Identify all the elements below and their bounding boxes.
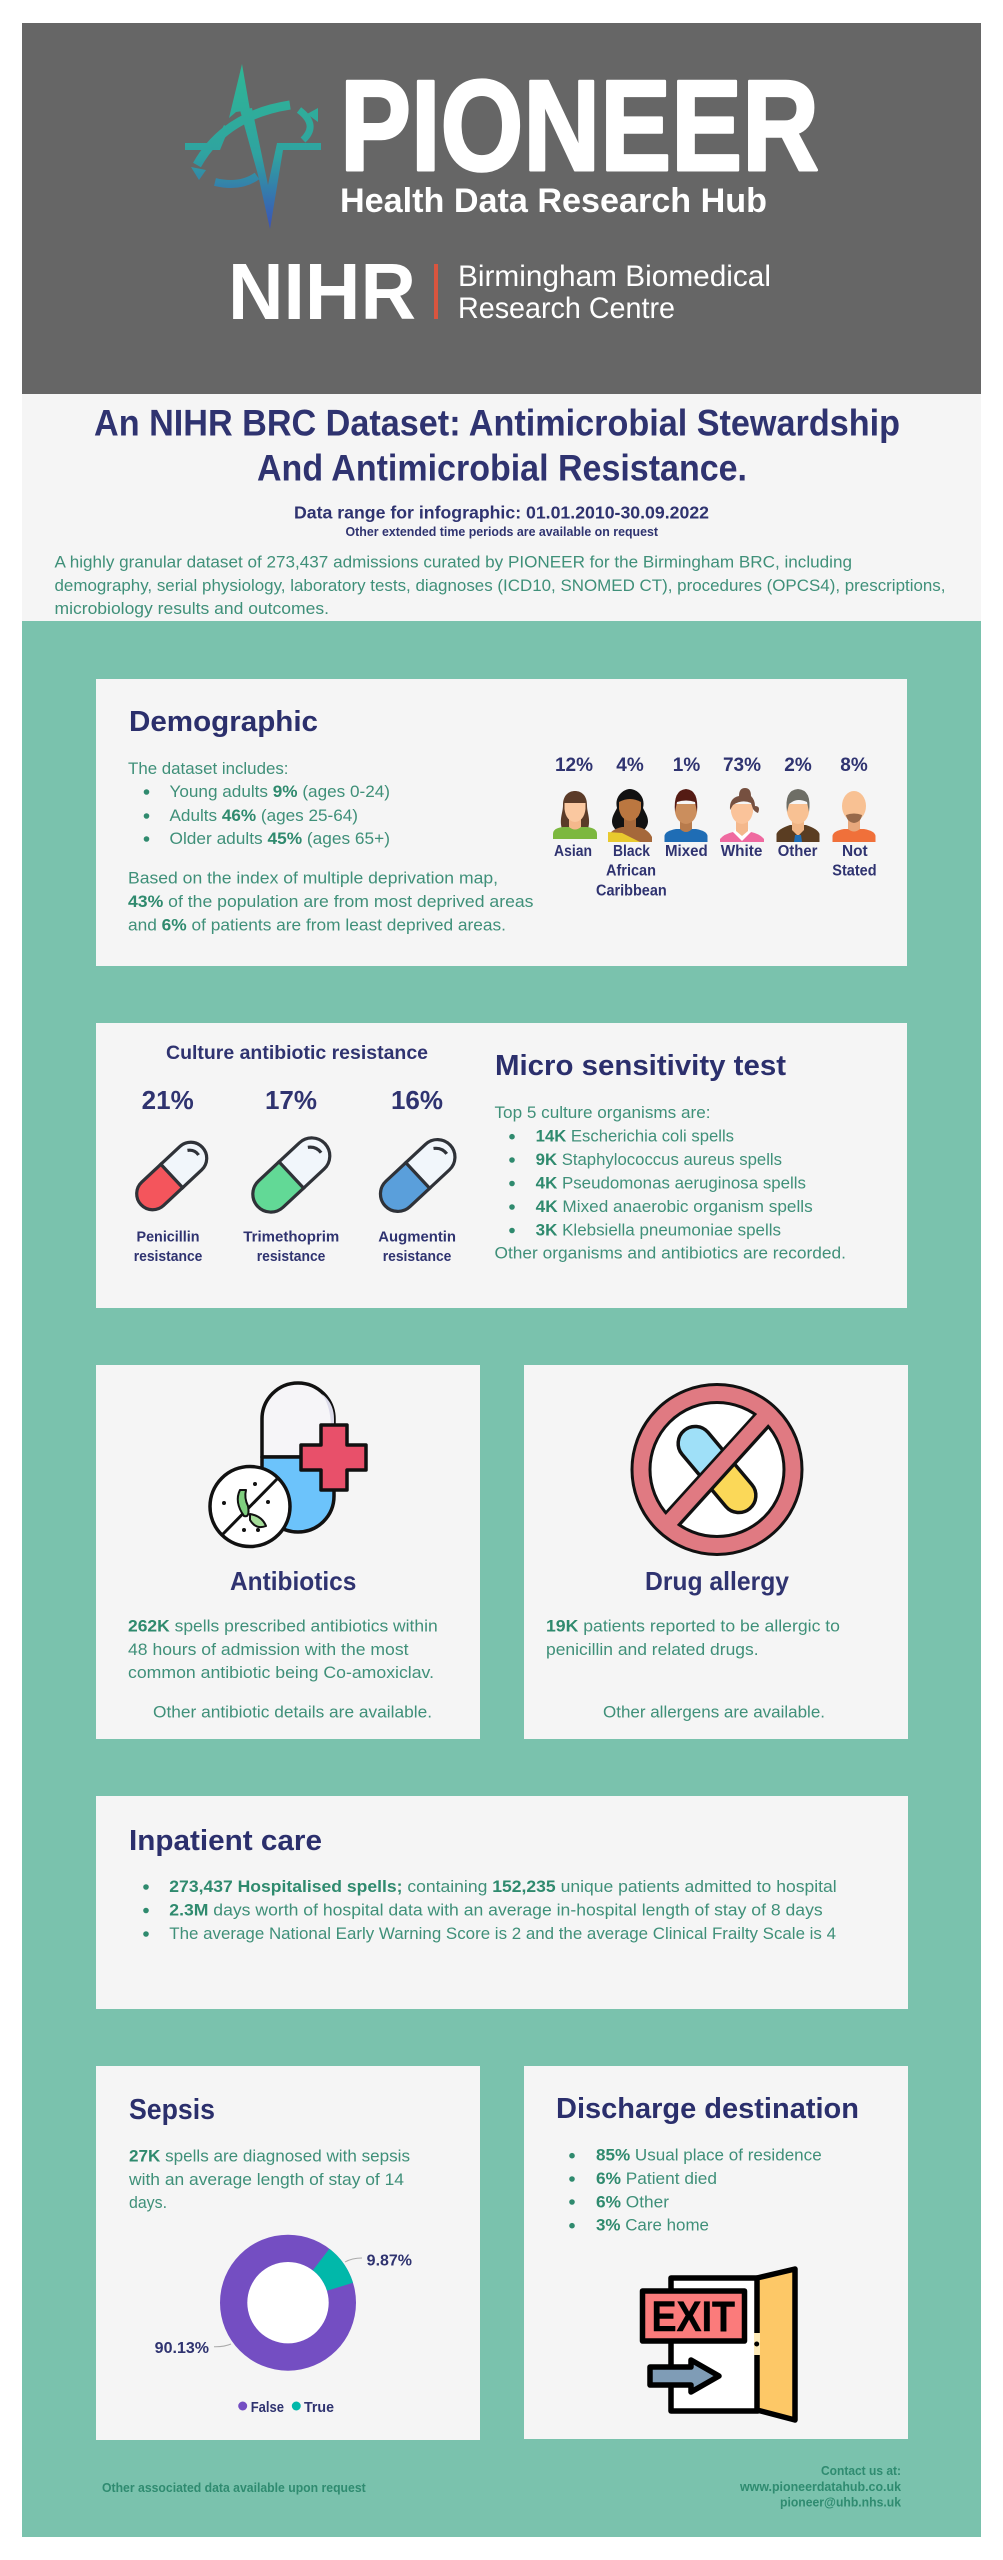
ethnicity labels: African (606, 863, 656, 880)
age breakdown: Adults 46% (ages 25-64) (170, 807, 358, 825)
deprivation text (128, 870, 534, 934)
resistance percentages: 21% (142, 1085, 194, 1115)
antibiotics text: Other antibiotic details are available. (153, 1704, 432, 1722)
icon: mixed person (664, 789, 708, 842)
data range note: Other extended time periods are available on request (346, 525, 659, 539)
discharge list: 6% Other (596, 2193, 670, 2211)
discharge list: 85% Usual place of residence (596, 2147, 822, 2165)
ethnicity percentages (555, 755, 868, 776)
sepsis heading: Sepsis (129, 2094, 215, 2126)
culture heading: Culture antibiotic resistance (166, 1043, 428, 1064)
discharge list: 6% Patient died (596, 2170, 717, 2188)
panel: antibiotics (96, 1365, 480, 1739)
Health Data Research Hub: Health Data Research Hub (340, 182, 767, 220)
Birmingham Biomedical Research Centre: Research Centre (458, 292, 675, 325)
ethnicity labels: Asian (554, 843, 592, 860)
organism list: Other organisms and antibiotics are recorded. (494, 1245, 846, 1263)
PIONEER wordmark: PIONEER (340, 54, 819, 198)
panel: drug allergy (524, 1365, 908, 1739)
sepsis text (128, 2148, 410, 2212)
icon: exit door (642, 2269, 795, 2420)
organism list: Top 5 culture organisms are: (494, 1104, 710, 1122)
drug allergy text: 19K patients reported to be allergic to (546, 1618, 840, 1636)
icon: green pill (245, 1130, 337, 1220)
age breakdown: Older adults 45% (ages 65+) (170, 830, 390, 848)
title: And Antimicrobial Resistance. (257, 448, 747, 488)
demographic heading: Demographic (129, 706, 318, 738)
icon: no drugs sign (641, 1394, 793, 1546)
antibiotics heading: Antibiotics (230, 1566, 356, 1596)
footer note: Other associated data available upon request (102, 2480, 366, 2495)
age breakdown (128, 760, 390, 848)
inpatient list: The average National Early Warning Score is 2 and the average Clinical Frailty Scale is 4 (169, 1925, 836, 1943)
antibiotics text: 262K spells prescribed antibiotics within (128, 1618, 438, 1636)
icon: red pill (130, 1136, 213, 1216)
panel: sepsis (96, 2066, 480, 2440)
sepsis text: with an average length of stay of 14 (128, 2171, 404, 2189)
organism list: 4K Mixed anaerobic organism spells (536, 1198, 813, 1216)
organism list: 14K Escherichia coli spells (536, 1128, 734, 1146)
drug allergy text (546, 1618, 840, 1722)
micro sensitivity heading: Micro sensitivity test (495, 1050, 786, 1082)
icon: antibiotics capsule, cross and tablet (210, 1383, 366, 1546)
donut chart (155, 2235, 412, 2371)
ethnicity percentages: 73% (723, 755, 761, 776)
antibiotics text: 48 hours of admission with the most (128, 1641, 409, 1659)
resistance labels (134, 1229, 456, 1265)
contact details: Contact us at: (821, 2463, 901, 2478)
resistance percentages: 17% (265, 1085, 317, 1115)
inpatient list (143, 1878, 837, 1943)
antibiotics text: common antibiotic being Co-amoxiclav. (128, 1664, 434, 1682)
ethnicity percentages: 1% (673, 755, 700, 776)
organism list (494, 1104, 846, 1263)
panel: inpatient care (96, 1796, 908, 2009)
resistance percentages: 16% (391, 1085, 443, 1115)
resistance percentages (142, 1085, 443, 1115)
intro section (22, 394, 981, 621)
discharge heading: Discharge destination (556, 2093, 859, 2125)
sepsis text: days. (129, 2194, 167, 2212)
icon: asian person (553, 791, 597, 839)
ethnicity percentages: 2% (784, 755, 812, 776)
ethnicity labels: Black (613, 843, 650, 860)
drug allergy text: Other allergens are available. (603, 1704, 825, 1722)
antibiotics text (128, 1618, 438, 1722)
icon: white person (720, 788, 764, 842)
resistance labels: Trimethoprim (243, 1229, 339, 1246)
icon: exit door: EXIT (652, 2293, 735, 2341)
resistance labels: Augmentin (378, 1229, 456, 1246)
ethnicity labels: White (721, 843, 763, 860)
icon: PIONEER logo mark (185, 64, 321, 229)
contact details: pioneer@uhb.nhs.uk (780, 2495, 902, 2510)
donut legend: True (304, 2400, 334, 2416)
title (94, 402, 900, 488)
drug allergy text: penicillin and related drugs. (546, 1641, 759, 1659)
organism list: 3K Klebsiella pneumoniae spells (536, 1222, 781, 1240)
ethnicity percentages: 4% (616, 755, 644, 776)
deprivation text: and 6% of patients are from least deprived areas. (128, 916, 506, 934)
ethnicity labels: Other (778, 843, 817, 860)
inpatient heading: Inpatient care (129, 1825, 322, 1857)
Birmingham Biomedical Research Centre: Birmingham Biomedical (458, 260, 771, 293)
panel: demographic (96, 679, 907, 966)
icon: blue pill (373, 1132, 462, 1219)
ethnicity percentages: 8% (840, 755, 868, 776)
ethnicity labels: Stated (832, 863, 877, 880)
NIHR wordmark: NIHR (228, 247, 416, 336)
ethnicity labels (554, 843, 877, 900)
intro paragraph (54, 554, 946, 618)
resistance labels: resistance (383, 1248, 451, 1265)
organism list: 4K Pseudomonas aeruginosa spells (536, 1175, 806, 1193)
discharge list: 3% Care home (596, 2217, 709, 2235)
inpatient list: 273,437 Hospitalised spells; containing 152,235 unique patients admitted to hospital (169, 1878, 837, 1896)
Birmingham Biomedical Research Centre (458, 260, 771, 325)
resistance labels: Penicillin (136, 1229, 200, 1246)
inpatient list: 2.3M days worth of hospital data with an average in-hospital length of stay of 8 days (169, 1902, 823, 1920)
icon: other person (776, 789, 820, 842)
intro paragraph: demography, serial physiology, laboratory tests, diagnoses (ICD10, SNOMED CT), procedures (OPCS4), prescriptions, (54, 577, 946, 595)
donut chart: 9.87% (367, 2253, 412, 2270)
deprivation text: 43% of the population are from most deprived areas (128, 893, 534, 911)
data range: Data range for infographic: 01.01.2010-30.09.2022 (294, 502, 709, 522)
panel: culture resistance and micro sensitivity (96, 1023, 907, 1308)
drug allergy heading: Drug allergy (645, 1566, 790, 1596)
ethnicity labels: Mixed (665, 843, 708, 860)
NIHR divider (434, 264, 438, 319)
resistance labels: resistance (257, 1248, 325, 1265)
donut chart: 90.13% (155, 2340, 209, 2357)
icon: not stated person (832, 791, 876, 842)
sepsis text: 27K spells are diagnosed with sepsis (129, 2148, 410, 2166)
donut legend (238, 2400, 334, 2416)
icon: black african caribbean person (608, 789, 652, 842)
ethnicity percentages: 12% (555, 755, 593, 776)
contact details: www.pioneerdatahub.co.uk (739, 2479, 902, 2494)
resistance labels: resistance (134, 1248, 202, 1265)
contact details (739, 2463, 902, 2510)
ethnicity labels: Not (842, 843, 868, 860)
title: An NIHR BRC Dataset: Antimicrobial Stewardship (94, 402, 900, 444)
intro paragraph: A highly granular dataset of 273,437 admissions curated by PIONEER for the Birmingham BRC, including (54, 554, 852, 572)
ethnicity labels: Caribbean (596, 883, 667, 900)
green background section (22, 621, 981, 2537)
intro paragraph: microbiology results and outcomes. (54, 600, 329, 618)
panel: discharge destination (524, 2066, 908, 2439)
deprivation text: Based on the index of multiple deprivation map, (128, 870, 498, 888)
organism list: 9K Staphylococcus aureus spells (536, 1151, 782, 1169)
age breakdown: Young adults 9% (ages 0-24) (170, 783, 390, 801)
donut legend: False (251, 2400, 284, 2416)
header banner (22, 23, 981, 394)
discharge list (569, 2147, 822, 2235)
age breakdown: The dataset includes: (128, 760, 288, 778)
